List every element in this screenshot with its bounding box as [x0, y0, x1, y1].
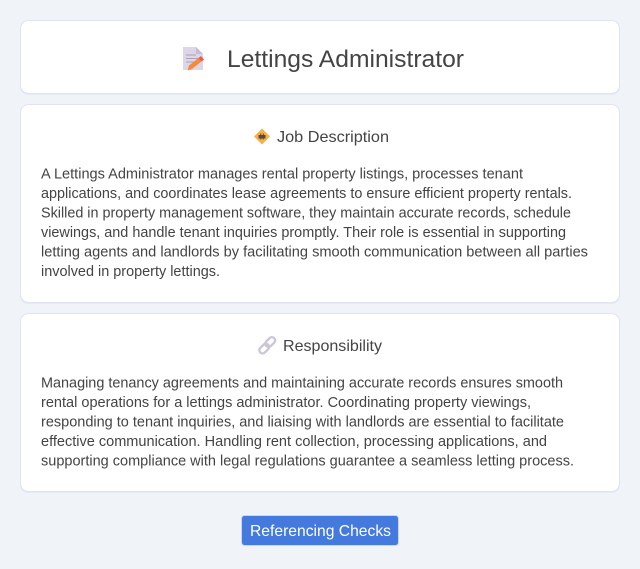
text block: responsibility: effective communication. Handling rent collection, processing applications, and: [41, 434, 547, 450]
text block: responsibility: responding to tenant inquiries, and liaising with landlords are essential to facilitate: [41, 414, 564, 430]
icon: chain link: [258, 336, 276, 355]
text block: job description: applications, and coordinates lease agreements to ensure efficient property rentals.: [41, 186, 572, 202]
panel: responsibility: [20, 314, 620, 493]
panel: job description: [20, 104, 620, 304]
text block: responsibility: [41, 376, 574, 470]
text block: responsibility: Managing tenancy agreements and maintaining accurate records ensures smooth: [41, 376, 563, 392]
panel: title: [20, 20, 620, 95]
text block: responsibility: supporting compliance with legal regulations guarantee a seamless letting process.: [41, 454, 574, 470]
text block: job description: letting agents and landlords by facilitating smooth communication between all parties: [41, 244, 588, 260]
text block: job description: [41, 166, 588, 280]
title text: Lettings Administrator: [227, 46, 464, 73]
heading: job description: Job Description: [277, 129, 389, 146]
text block: job description: Skilled in property management software, they maintain accurate records, schedule: [41, 206, 571, 222]
heading: responsibility: Responsibility: [283, 338, 382, 355]
text block: responsibility: rental operations for a lettings administrator. Coordinating property viewings,: [41, 395, 531, 411]
button: referencing checks: Referencing Checks: [250, 523, 391, 540]
icon: diamond sign: [254, 128, 270, 144]
text block: job description: A Lettings Administrator manages rental property listings, processes tenant: [41, 166, 523, 182]
text block: job description: involved in property lettings.: [41, 264, 220, 280]
button: referencing checks: [242, 516, 398, 546]
text block: job description: viewings, and handle tenant inquiries promptly. Their role is essential in supporting: [41, 225, 566, 241]
icon: document with pencil: [183, 47, 204, 70]
